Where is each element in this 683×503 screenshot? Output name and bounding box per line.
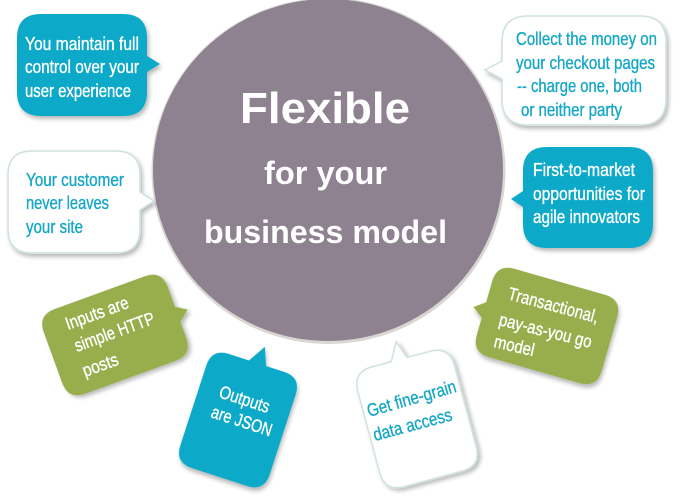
callout: full control: user experience	[25, 81, 131, 101]
central circle	[152, 0, 506, 344]
callout: inputs: posts	[80, 349, 121, 381]
callout: outputs: are JSON	[209, 402, 275, 440]
callout: first-to-market: agile innovators	[533, 207, 640, 227]
callout: customer never leaves: never leaves	[26, 193, 109, 213]
callout: outputs: Outputs	[217, 382, 272, 417]
callout: first-to-market: First-to-market	[533, 160, 635, 180]
callout: fine-grain: data access	[371, 405, 454, 445]
callout: transactional: Transactional,	[506, 284, 601, 327]
callout: collect the money	[485, 16, 666, 125]
callout: full control: control over your	[25, 57, 139, 77]
callout: fine-grain	[348, 329, 481, 492]
callout: customer never leaves: your site	[26, 217, 83, 237]
callout: outputs	[175, 331, 307, 492]
title: business model	[204, 214, 447, 250]
callout: inputs: simple HTTP	[72, 308, 157, 356]
callout: transactional: pay-as-you go	[497, 309, 594, 352]
callout: collect the money: -- charge one, both	[517, 76, 642, 96]
callout: collect the money: or neither party	[521, 100, 622, 120]
callout: inputs	[38, 266, 203, 400]
callout: collect the money: Collect the money on	[516, 29, 657, 49]
callout: customer never leaves: Your customer	[26, 170, 124, 190]
title: for your	[264, 155, 387, 191]
title: Flexible	[240, 84, 410, 133]
callout: full control: You maintain full	[25, 34, 139, 54]
callout: fine-grain: Get fine-grain	[365, 376, 459, 421]
callout: collect the money: your checkout pages	[516, 53, 655, 73]
callout: transactional	[461, 261, 622, 388]
title	[204, 84, 447, 250]
callout: inputs: Inputs are	[63, 292, 131, 334]
callout: transactional: model	[492, 331, 537, 360]
callout: first-to-market: opportunities for	[533, 184, 645, 204]
callout: full control	[17, 14, 160, 116]
callout: customer never leaves	[8, 151, 154, 253]
callout: first-to-market	[511, 147, 653, 248]
